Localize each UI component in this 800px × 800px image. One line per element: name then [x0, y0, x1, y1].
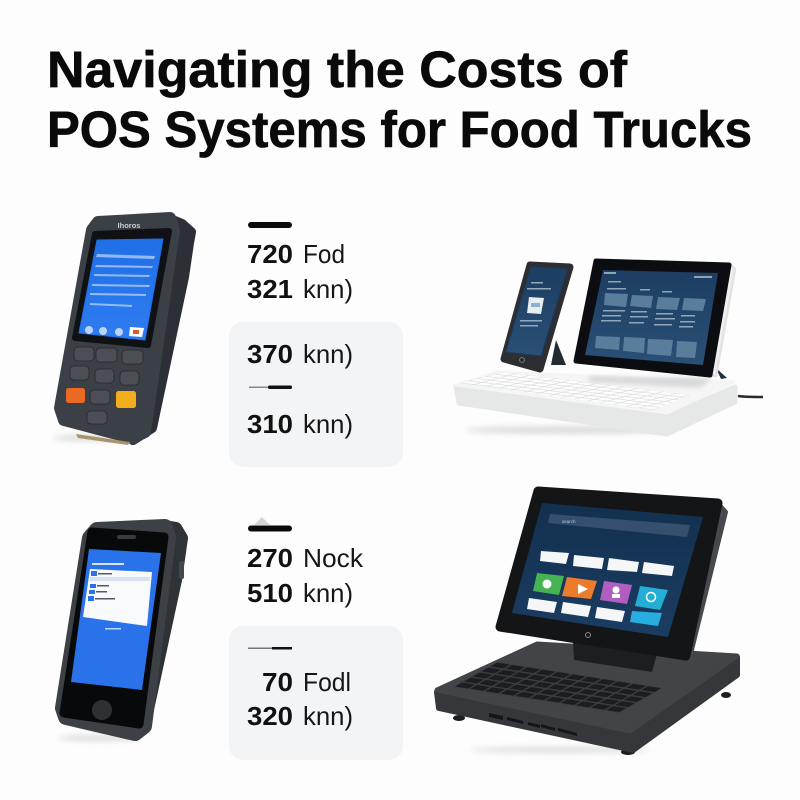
white menu tiles lower: [527, 598, 662, 626]
screen bottom buttons: [85, 326, 144, 337]
base front: [437, 657, 737, 750]
tablet body edge: [600, 495, 726, 658]
stat group 1: Fod: [303, 239, 345, 269]
coloured app tiles: [533, 573, 668, 610]
phone screen: [506, 267, 567, 356]
black bezel: [64, 532, 164, 724]
phone home button: [520, 358, 524, 362]
tablet white edge: [710, 264, 735, 376]
device front: [60, 218, 174, 438]
stat group 3: Nock: [303, 543, 364, 573]
stat group 3: knn): [303, 578, 353, 608]
stat group 1: 321: [247, 274, 293, 304]
ports: [489, 713, 577, 736]
search bar text: search: [562, 519, 576, 524]
tablet kickstand: [716, 368, 727, 379]
panel: stat group 4: 70: [262, 667, 293, 697]
icon: white dock with phone, tablet and keyboard: [456, 261, 763, 434]
panel: stat group 2: 310: [247, 409, 293, 439]
stat group 3: 270: [247, 543, 293, 573]
panel: stat group 2: 370: [247, 339, 293, 369]
dock base top: [456, 372, 734, 413]
cable: [738, 396, 763, 397]
device side and back: [120, 219, 191, 440]
panel: stat group 2: knn): [303, 339, 353, 369]
icon: black handheld smartphone terminal: [58, 526, 184, 741]
white keyboard: [460, 372, 690, 410]
panel: stat group 4: knn): [303, 701, 353, 731]
tablet logo: [586, 632, 590, 638]
side button: [179, 561, 184, 579]
base feet: [453, 715, 465, 721]
white list panel: [83, 569, 152, 626]
device front: [63, 527, 168, 733]
tablet shadow on dock: [588, 376, 712, 388]
panel: stat group 2: knn): [303, 409, 353, 439]
tablet body: [500, 491, 718, 656]
screen rows: [90, 254, 155, 307]
stat group 1: 720: [247, 239, 293, 269]
tablet screen: [512, 503, 703, 637]
title: [47, 41, 752, 158]
home button: [92, 700, 112, 720]
black bezel: [75, 231, 169, 345]
phone app tile: [520, 282, 551, 326]
blue screen: [79, 239, 163, 340]
base top: [437, 644, 737, 731]
yellow key: [116, 391, 136, 408]
panel: stat group 4: [229, 626, 403, 760]
panel: stat group 4: Fodl: [303, 667, 351, 697]
panel: stat group 2: [229, 322, 403, 467]
brand label: Ihoros: [118, 221, 140, 230]
stat group 1: [247, 222, 353, 304]
speaker: [117, 535, 136, 539]
device side: [125, 526, 182, 735]
dock base front: [456, 386, 735, 434]
stat group 3: 510: [247, 578, 293, 608]
tablet dashboard tiles: [595, 272, 712, 358]
stat group 3: [247, 517, 364, 608]
orange key: [66, 388, 85, 403]
keyboard: [453, 662, 663, 713]
phone kickstand: [551, 340, 566, 365]
tablet body: [576, 261, 729, 375]
stat group 1: knn): [303, 274, 353, 304]
tablet screen: [585, 270, 718, 365]
icon: handheld POS terminal with keypad: [53, 218, 191, 445]
panel: stat group 4: 320: [247, 701, 293, 731]
title: POS Systems for Food Trucks: [47, 101, 752, 158]
stand: [573, 640, 658, 672]
blue screen: [71, 549, 161, 690]
phone body: [504, 265, 570, 369]
white menu tiles upper: [540, 551, 674, 576]
title: Navigating the Costs of: [47, 41, 628, 98]
card slot: [76, 434, 130, 445]
keypad: [66, 347, 143, 424]
header text strip: [92, 563, 124, 565]
list rows: [88, 571, 150, 601]
icon: dark tablet POS with keyboard base: [437, 491, 737, 755]
search bar: [548, 514, 690, 537]
